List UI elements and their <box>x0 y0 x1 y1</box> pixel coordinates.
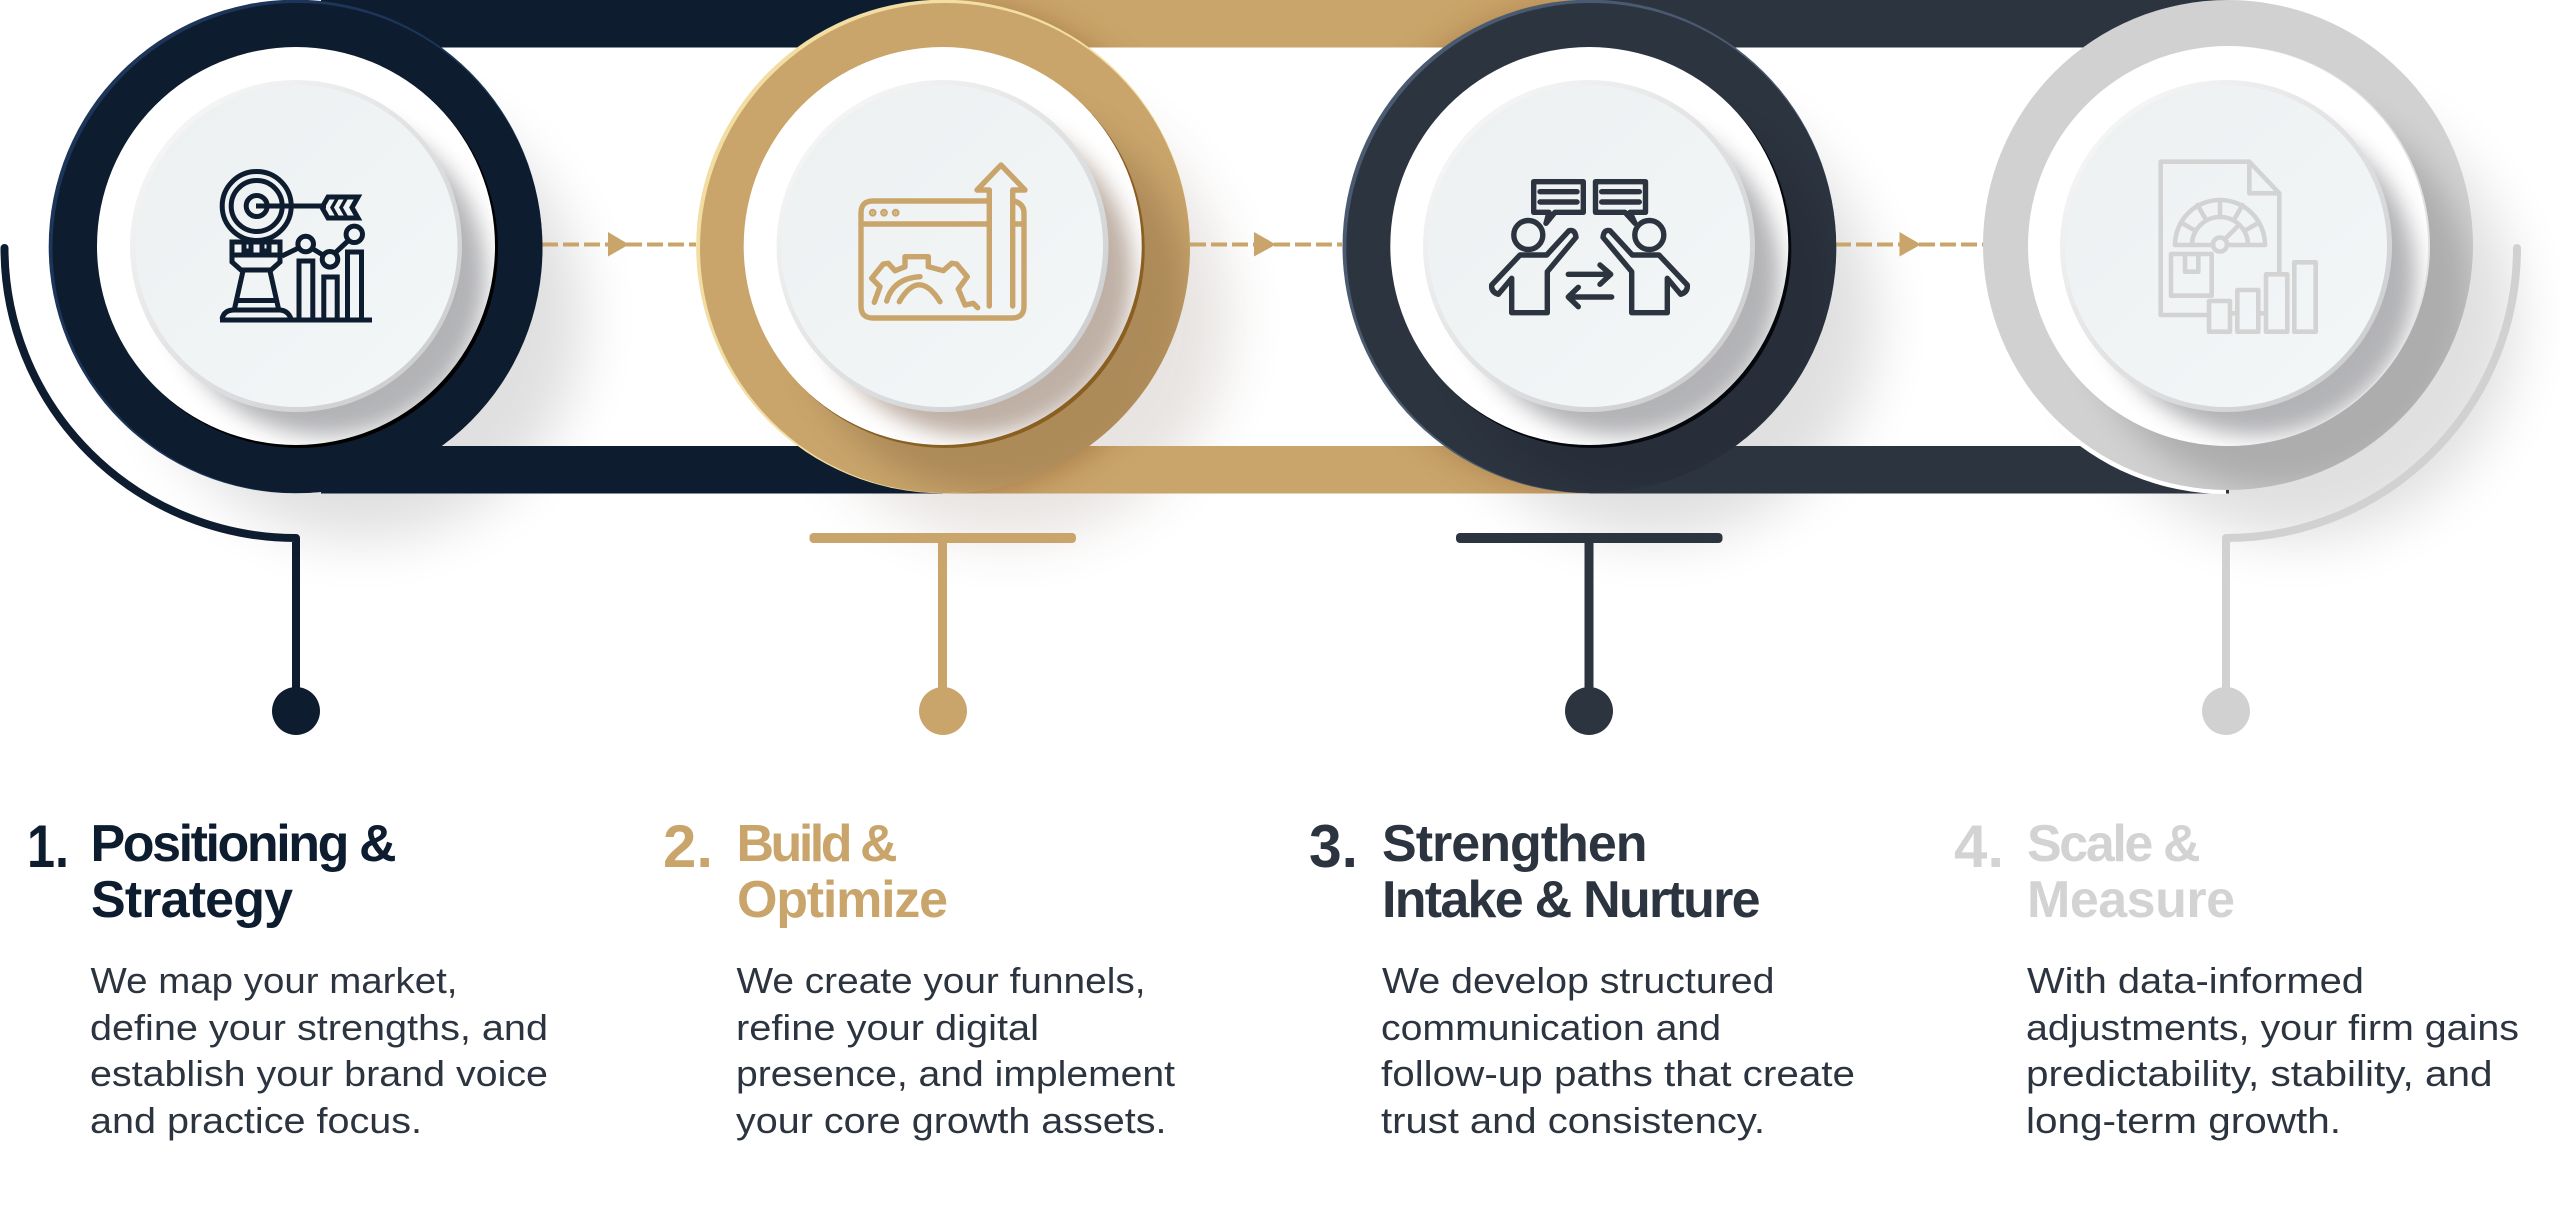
node 1: navy ring <box>49 0 542 493</box>
step 3 description: follow-up paths that create <box>1381 1053 1855 1094</box>
step 3 description: communication and <box>1381 1007 1721 1048</box>
node 4: grey ring <box>1980 0 2473 494</box>
step 2 heading: Optimize <box>737 871 948 929</box>
node 3: slate ring <box>1342 0 1836 495</box>
step 4 text <box>1954 813 2519 1141</box>
dashed arrow: step 2 to 3 <box>1190 232 1342 256</box>
step 1 heading: Strategy <box>91 871 293 929</box>
icon: report with gauge, box and bars <box>2161 162 2316 332</box>
step 1 number: 1. <box>27 813 69 880</box>
leader 1: curved line and dot <box>4 248 320 735</box>
step 2 text <box>663 813 1175 1141</box>
step 2 description <box>736 960 1175 1141</box>
long soft shadows <box>140 96 2517 540</box>
step 2 description: We create your funnels, <box>736 960 1146 1001</box>
leader 2: T-bar and dot <box>810 533 1076 735</box>
step 1 description: and practice focus. <box>90 1100 422 1141</box>
step 4 description <box>2026 960 2519 1141</box>
step 3 description: trust and consistency. <box>1381 1100 1765 1141</box>
step 1 heading: Positioning & <box>90 815 396 873</box>
step 4 description: long-term growth. <box>2026 1100 2341 1141</box>
step 2 heading <box>736 815 948 929</box>
step 2 description: your core growth assets. <box>736 1100 1166 1141</box>
step 4 heading <box>2027 815 2235 929</box>
step 2 number: 2. <box>663 813 713 880</box>
step 3 heading: Strengthen <box>1382 815 1648 873</box>
step 1 description: We map your market, <box>90 960 458 1001</box>
leader 3: T-bar and dot <box>1456 533 1722 735</box>
icon: target, rook and bar chart <box>220 172 372 320</box>
step 3 description <box>1381 960 1855 1141</box>
step 3 heading <box>1382 815 1761 929</box>
step 3 heading: Intake & Nurture <box>1382 871 1761 929</box>
step 1 description: define your strengths, and <box>90 1007 548 1048</box>
step 3 text <box>1309 813 1855 1141</box>
connector bands: top and bottom <box>321 0 2229 494</box>
dashed arrow: step 1 to 2 <box>542 232 696 256</box>
step 4 description: predictability, stability, and <box>2026 1053 2492 1094</box>
step 3 number: 3. <box>1309 813 1358 880</box>
step 1 description <box>90 960 548 1141</box>
step 4 description: With data-informed <box>2027 960 2364 1001</box>
step 1 heading <box>90 815 396 929</box>
step 1 text <box>27 813 548 1141</box>
step 4 heading: Measure <box>2027 871 2235 929</box>
cast shadows on gold band <box>943 0 1588 494</box>
leader 4: curved line and dot <box>2202 248 2517 735</box>
step 4 number: 4. <box>1954 813 2004 880</box>
icon: browser window with gear and growth arrow <box>861 165 1025 318</box>
node 2: gold ring <box>696 0 1190 495</box>
step 2 description: presence, and implement <box>736 1053 1175 1094</box>
step 4 description: adjustments, your firm gains <box>2026 1007 2519 1048</box>
step 4 heading: Scale & <box>2027 815 2201 873</box>
icon: two people exchanging messages <box>1492 182 1687 313</box>
step 2 description: refine your digital <box>736 1007 1039 1048</box>
step 2 heading: Build & <box>736 815 898 873</box>
dashed arrow: step 3 to 4 <box>1835 232 1987 256</box>
step 3 description: We develop structured <box>1382 960 1774 1001</box>
step 1 description: establish your brand voice <box>90 1053 548 1094</box>
